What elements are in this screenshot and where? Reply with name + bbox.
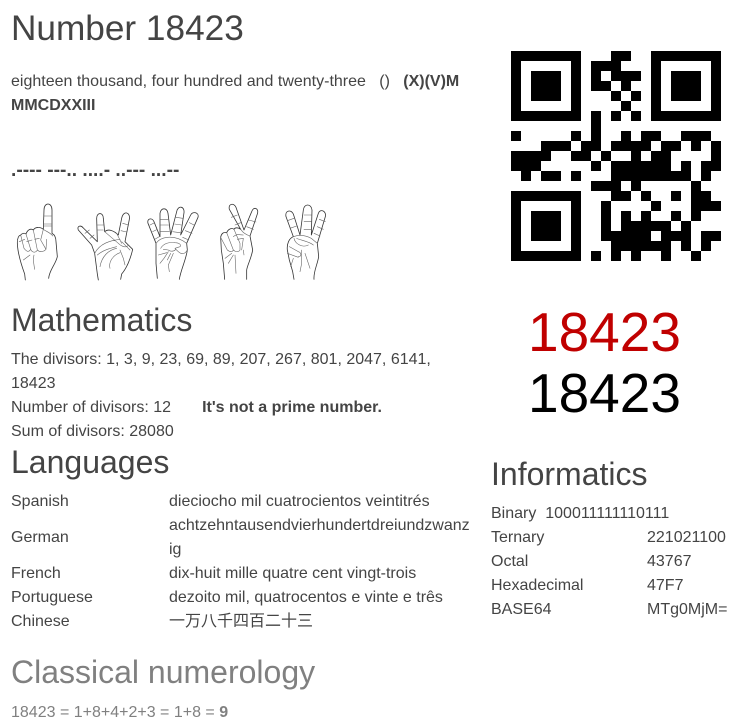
number in black: 18423	[528, 362, 681, 424]
heading: Informatics: Informatics	[491, 456, 647, 492]
heading: Mathematics: Mathematics	[11, 302, 192, 338]
table: informatics: 221021100	[647, 529, 726, 546]
table: languages: dezoito mil, quatrocentos e vinte e três	[169, 589, 443, 606]
table: languages: Chinese	[11, 613, 70, 630]
table: informatics: Ternary	[491, 529, 544, 546]
table: languages: achtzehntausendvierhundertdreiundzwanz	[169, 517, 470, 534]
text: morse code: .---- ---.. ....- ..--- ...--	[11, 160, 179, 181]
text: number in words and roman numeral: eighteen thousand, four hundred and twenty-three () (X)(V)M	[11, 73, 459, 90]
table: informatics: 43767	[647, 553, 692, 570]
table: informatics: Binary 100011111110111	[491, 505, 669, 522]
heading: Classical numerology: Classical numerology	[11, 654, 315, 690]
table: languages: dix-huit mille quatre cent vingt-trois	[169, 565, 416, 582]
QR code	[511, 51, 721, 261]
text: divisors: Number of divisors: 12 It's not a prime number.	[11, 399, 382, 416]
text: numerology sum: 18423 = 1+8+4+2+3 = 1+8 = 9	[11, 704, 228, 721]
table: informatics: MTg0MjM=	[647, 601, 727, 618]
table: informatics: BASE64	[491, 601, 551, 618]
table: informatics	[491, 505, 727, 618]
table: languages: 一万八千四百二十三	[169, 613, 313, 630]
title: Number 18423	[11, 9, 244, 48]
table: languages: Spanish	[11, 493, 69, 510]
heading: Languages: Languages	[11, 444, 169, 480]
table: languages: German	[11, 529, 69, 546]
number in red: 18423	[528, 301, 681, 363]
text: divisors	[11, 351, 431, 440]
icon: sign language hands	[16, 204, 326, 280]
text: divisors: 18423	[11, 375, 56, 392]
table: languages	[11, 493, 470, 630]
table: informatics: Hexadecimal	[491, 577, 583, 594]
table: languages: dieciocho mil cuatrocientos veintitrés	[169, 493, 430, 510]
table: languages: French	[11, 565, 61, 582]
table: languages: Portuguese	[11, 589, 93, 606]
text: divisors: Sum of divisors: 28080	[11, 423, 174, 440]
table: informatics: Octal	[491, 553, 528, 570]
text: number in words and roman numeral	[11, 73, 459, 114]
text: divisors: The divisors: 1, 3, 9, 23, 69, 89, 207, 267, 801, 2047, 6141,	[11, 351, 431, 368]
text: number in words and roman numeral: MMCDXXIII	[11, 97, 95, 114]
table: languages: ig	[169, 541, 181, 558]
table: informatics: 47F7	[647, 577, 683, 594]
